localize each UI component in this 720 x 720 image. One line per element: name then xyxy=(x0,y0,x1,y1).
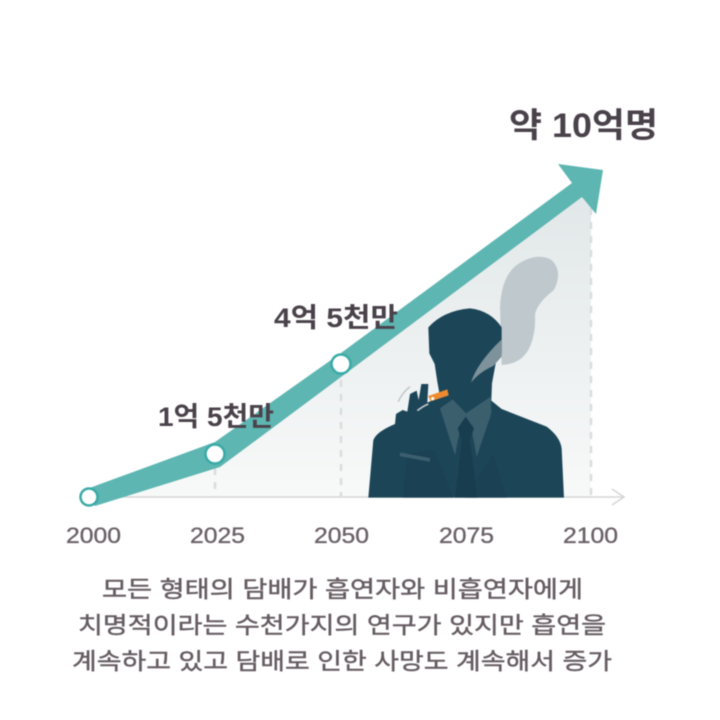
pocket square line xyxy=(400,454,430,460)
caption xyxy=(72,576,612,674)
x axis years xyxy=(66,523,618,548)
data point 2050 xyxy=(332,354,350,374)
x axis years: 2075 xyxy=(439,523,494,548)
necktie xyxy=(455,417,477,498)
smoke across face xyxy=(471,339,502,383)
data point 2000 xyxy=(80,488,98,506)
x axis xyxy=(89,489,624,505)
x axis years: 2050 xyxy=(314,523,369,548)
x axis years: 2100 xyxy=(563,523,618,548)
x axis years: 2025 xyxy=(190,523,245,548)
cigarette xyxy=(428,389,449,401)
shirt collar xyxy=(440,397,491,457)
x axis years: 2000 xyxy=(66,523,121,548)
label: 1억 5천만: 1억 5천만 xyxy=(158,402,274,432)
shaded area under growth line xyxy=(123,190,591,497)
caption: 모든 형태의 담배가 흡연자와 비흡연자에게 xyxy=(102,576,583,602)
label: 4억 5천만: 4억 5천만 xyxy=(274,303,398,333)
suit and head xyxy=(368,308,564,498)
growth arrow xyxy=(84,164,603,506)
suit shading xyxy=(403,450,507,498)
caption: 계속하고 있고 담배로 인한 사망도 계속해서 증가 xyxy=(72,648,612,674)
label: 10억: 약 10억명 xyxy=(509,107,658,145)
smoke plume xyxy=(500,257,558,365)
data point 2025 xyxy=(206,444,224,464)
smoker silhouette xyxy=(368,308,564,498)
caption: 치명적이라는 수천가지의 연구가 있지만 흡연을 xyxy=(78,612,606,638)
wisps by the hand xyxy=(398,387,428,411)
